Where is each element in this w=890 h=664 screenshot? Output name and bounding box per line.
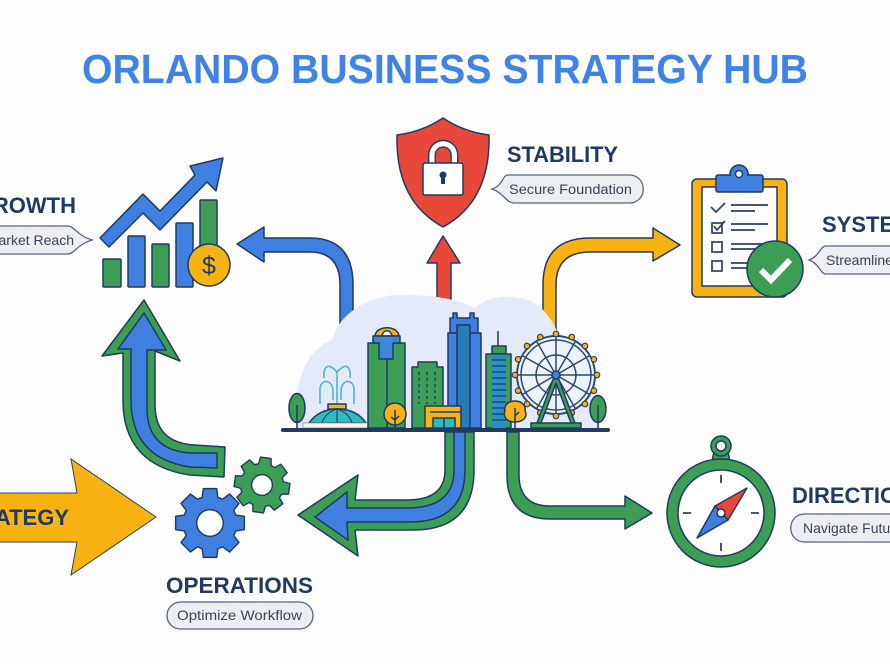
blue tower bbox=[448, 313, 481, 428]
growth section bbox=[0, 158, 230, 287]
title: ORLANDO BUSINESS STRATEGY HUB bbox=[82, 46, 808, 92]
ground line bbox=[281, 428, 610, 432]
stability section bbox=[397, 118, 643, 227]
arrow: city to systems bbox=[543, 228, 680, 330]
arrow: city to growth bbox=[237, 227, 353, 325]
operations pill: Optimize Workflow bbox=[177, 607, 303, 623]
direction section bbox=[667, 436, 890, 567]
systems pill bbox=[809, 246, 890, 274]
arrow: city to operations bbox=[298, 432, 474, 556]
yellow tree one bbox=[384, 403, 406, 428]
strategy arrow bbox=[0, 459, 156, 575]
yellow entry building bbox=[425, 406, 461, 428]
direction pill bbox=[791, 514, 890, 542]
icon: blue gear bbox=[176, 489, 244, 557]
arrow: operations to growth bbox=[102, 300, 225, 477]
arrow: city to stability bbox=[427, 236, 460, 305]
stability pill bbox=[492, 175, 643, 203]
operations pill bbox=[167, 602, 313, 629]
icon: bar chart with coin bbox=[100, 158, 230, 287]
ferris wheel bbox=[512, 331, 600, 428]
icon: bar chart with coin: $ bbox=[202, 252, 216, 280]
operations heading: OPERATIONS bbox=[166, 573, 313, 598]
stability pill: Secure Foundation bbox=[509, 181, 632, 197]
growth pill bbox=[0, 226, 92, 254]
city skyline bbox=[281, 295, 610, 432]
striped tower bbox=[486, 331, 511, 428]
yellow tree two bbox=[504, 401, 526, 428]
right tree bbox=[590, 396, 606, 428]
arrow: city to direction bbox=[507, 432, 652, 529]
cloud backdrop bbox=[296, 295, 600, 428]
icon: clipboard checklist bbox=[692, 165, 803, 297]
operations section bbox=[166, 454, 313, 629]
icon: green gear bbox=[231, 454, 293, 516]
icon: compass bbox=[667, 436, 775, 567]
icon: shield with padlock bbox=[397, 118, 489, 227]
systems section bbox=[692, 165, 890, 297]
dome tower bbox=[368, 328, 405, 428]
left tree bbox=[289, 394, 305, 428]
fountain bbox=[303, 366, 370, 428]
stability heading: STABILITY bbox=[507, 142, 618, 167]
green office block bbox=[412, 362, 443, 428]
